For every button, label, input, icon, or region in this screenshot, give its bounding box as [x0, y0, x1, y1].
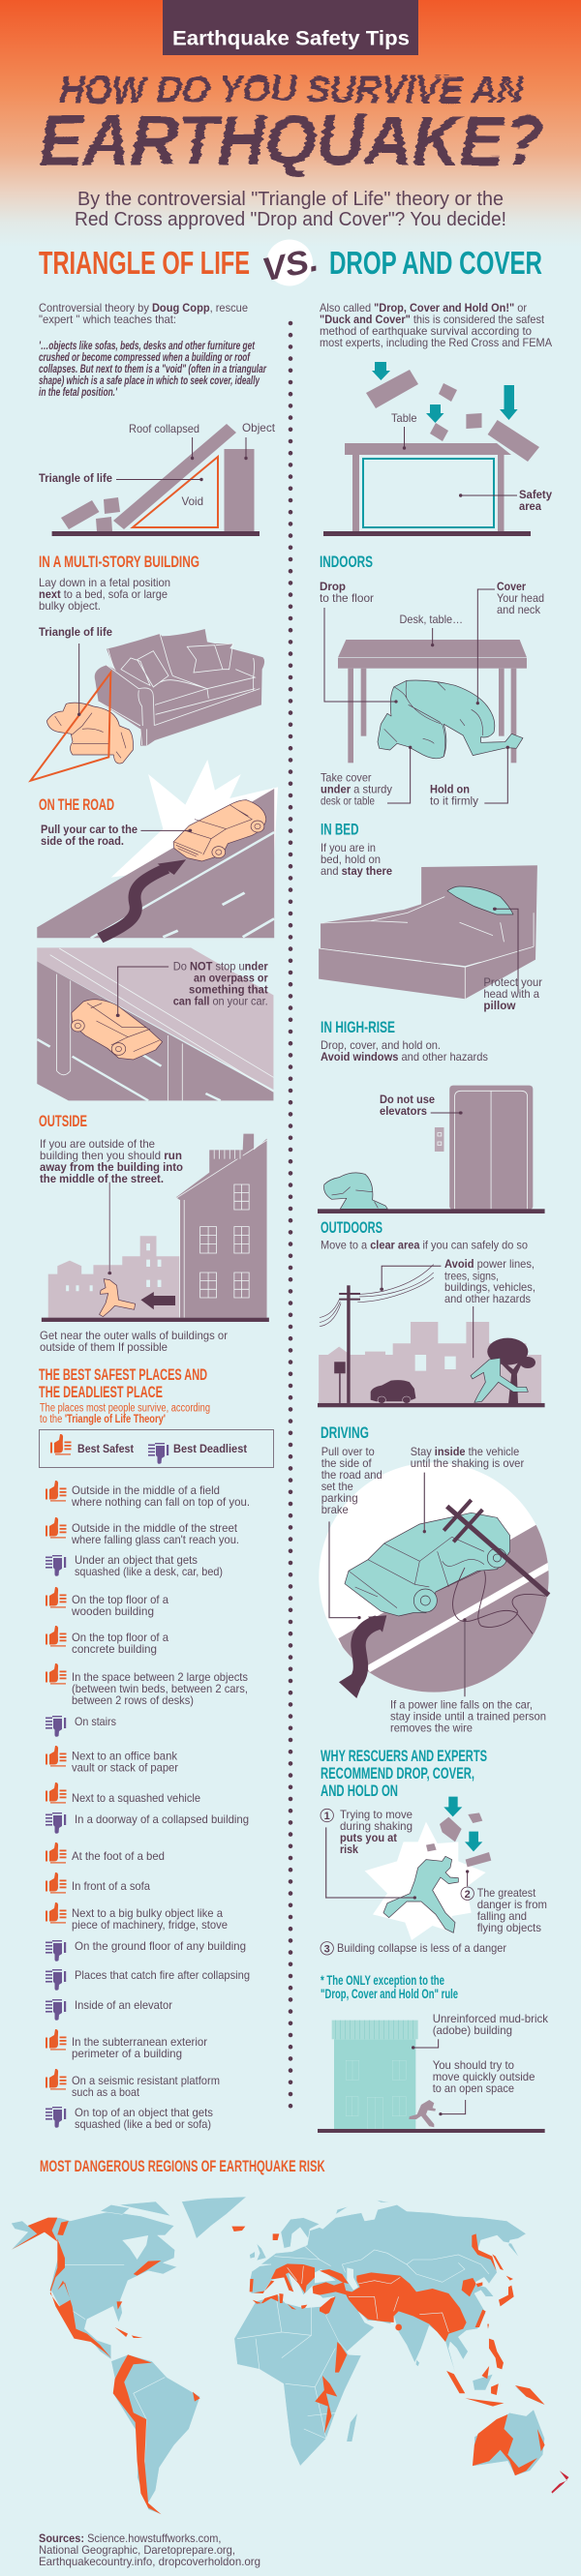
- list item: In the subterranean exterior: [72, 2035, 207, 2049]
- text: adobe: Unreinforced mud-brick: [433, 2012, 549, 2025]
- desk: [338, 640, 527, 763]
- heading: why rescuers: AND HOLD ON: [321, 1782, 398, 1800]
- text: triangle quote: in the fetal position.': [39, 385, 118, 399]
- text: drop and cover intro: [320, 301, 552, 349]
- list item: [46, 2106, 213, 2131]
- text: adobe: (adobe) building: [433, 2023, 512, 2037]
- person: [378, 680, 523, 759]
- diagram: triangle of life: Void: [182, 494, 203, 508]
- road: [37, 789, 274, 938]
- arrow: [140, 1292, 175, 1309]
- section: on the road: [39, 796, 138, 848]
- list item: Next to a squashed vehicle: [72, 1791, 200, 1805]
- diagram: triangle of life: Roof collapsed: [129, 422, 199, 435]
- list item: [46, 2029, 207, 2060]
- illustration: car under power line: [319, 1462, 555, 1698]
- heading: triangle of life: TRIANGLE OF LIFE: [39, 245, 250, 281]
- heading: why rescuers: RECOMMEND DROP, COVER,: [321, 1764, 474, 1782]
- text: driving notes: [321, 1445, 546, 1735]
- section: high-rise: elevators: [380, 1104, 427, 1118]
- subtitle: Red Cross approved "Drop and Cover"? You decide!: [75, 209, 506, 230]
- runner: [383, 1856, 458, 1932]
- point 3: Building collapse is less of a danger: [337, 1941, 506, 1955]
- text: drop and cover intro: method of earthquake survival according to: [320, 324, 532, 338]
- section heading: best and deadliest: to the 'Triangle of Life Theory': [40, 1414, 166, 1425]
- point 2: danger is from: [477, 1898, 547, 1911]
- list item: [46, 1872, 150, 1893]
- text: triangle quote: shape) which is a safe place in which to seek cover, ideally: [39, 374, 260, 387]
- text: multi-story: [39, 576, 170, 639]
- heading: multi-story: IN A MULTI-STORY BUILDING: [39, 554, 199, 571]
- title: EARTHQUAKE?: [39, 102, 544, 180]
- text: drop and cover intro: most experts, including the Red Cross and FEMA: [320, 336, 552, 349]
- section: high-rise: Avoid windows and other hazards: [321, 1050, 488, 1063]
- diagram: table with falling debris: [323, 362, 552, 536]
- arrow: [100, 859, 186, 938]
- new zealand: [551, 2471, 568, 2494]
- text: triangle intro: [39, 301, 248, 326]
- section: outside: [39, 1113, 183, 1185]
- text: outer walls: outside of them If possible: [40, 1340, 168, 1354]
- tree: [487, 1338, 535, 1403]
- section: indoors: desk or table: [321, 794, 375, 808]
- versus badge: VS.: [259, 241, 321, 289]
- text: triangle intro: Controversial theory by Doug Copp, rescue: [39, 301, 248, 315]
- text: overpass warning: something that: [189, 983, 268, 997]
- section: high-rise: Drop, cover, and hold on.: [321, 1038, 441, 1052]
- list item: Next to an office bank: [72, 1750, 178, 1763]
- list item: where falling glass can't reach you.: [71, 1533, 239, 1546]
- list item: (between twin beds, between 2 cars,: [72, 1682, 248, 1695]
- section: indoors: Drop: [320, 580, 346, 593]
- list item: wooden building: [71, 1604, 154, 1618]
- exception heading: "Drop, Cover and Hold On" rule: [321, 1987, 458, 2001]
- text: overpass warning: Do NOT stop under: [173, 960, 268, 973]
- person in fetal position: [46, 703, 133, 764]
- list item: [46, 1517, 239, 1546]
- section: in bed: bed, hold on: [321, 853, 381, 866]
- car: [71, 1000, 163, 1060]
- section: indoors: to the floor: [320, 591, 374, 605]
- section: on the road: side of the road.: [41, 834, 124, 848]
- section: outdoors: and other hazards: [444, 1292, 531, 1305]
- section: on the road: Pull your car to the: [41, 823, 138, 836]
- point 2: [461, 1886, 547, 1934]
- section: high-rise: IN HIGH-RISE: [321, 1019, 395, 1036]
- text: drop and cover intro: Also called "Drop, Cover and Hold On!" or: [320, 301, 527, 315]
- illustration: outdoor hazards: [318, 1265, 545, 1407]
- text: multi-story: Triangle of life: [39, 625, 112, 639]
- borders: [274, 2245, 489, 2282]
- section: outdoors: trees, signs,: [444, 1270, 499, 1283]
- illustration: elevator: [318, 1086, 545, 1213]
- section: driving heading: DRIVING: [321, 1424, 369, 1442]
- point 3: 3: [324, 1943, 330, 1955]
- list item: Inside of an elevator: [75, 1998, 172, 2012]
- list item: [46, 1842, 165, 1864]
- heading: why rescuers: [321, 1747, 487, 1800]
- list item: On stairs: [75, 1715, 116, 1728]
- sources: National Geographic, Daretoprepare.org,: [39, 2543, 235, 2557]
- text: protect head: Protect your: [483, 975, 542, 989]
- text: drop and cover intro: "Duck and Cover" this is considered the safest: [320, 313, 545, 326]
- illustration: building and runner: [42, 1134, 269, 1322]
- legend: [39, 1430, 273, 1467]
- borders: [63, 2265, 337, 2465]
- section heading: best and deadliest: [39, 1365, 210, 1425]
- sources: Earthquakecountry.info, dropcoverholdon.org: [39, 2555, 260, 2568]
- ground: [42, 1318, 269, 1322]
- section: indoors: to it firmly: [430, 794, 478, 808]
- illustration: adobe building: [318, 2021, 545, 2133]
- point 2: The greatest: [477, 1886, 536, 1900]
- list item: Next to a big bulky object like a: [72, 1906, 223, 1920]
- section: outside: away from the building into: [40, 1160, 183, 1174]
- risk zones: [11, 2218, 545, 2514]
- list item: piece of machinery, fridge, stove: [72, 1918, 228, 1932]
- section: indoors: Hold on: [430, 783, 470, 796]
- section: indoors: [320, 554, 544, 808]
- section: in bed: If you are in: [321, 841, 376, 854]
- list item: In the space between 2 large objects: [72, 1670, 248, 1684]
- small running person: [409, 2100, 436, 2127]
- text: adobe: You should try to: [433, 2058, 514, 2072]
- text: triangle quote: '…objects like sofas, beds, desks and other furniture get: [39, 339, 256, 352]
- list item: [46, 1481, 250, 1509]
- list item: [46, 1968, 250, 1991]
- legend: Best Deadliest: [173, 1442, 247, 1455]
- text: driving notes: the side of: [321, 1456, 372, 1470]
- fallen power pole: [443, 1500, 549, 1633]
- car: [173, 800, 266, 861]
- list item: Under an object that gets: [75, 1553, 198, 1567]
- section: on the road: ON THE ROAD: [39, 796, 114, 814]
- section: in bed: [321, 822, 392, 878]
- section: indoors: Cover: [497, 580, 526, 593]
- text: triangle quote: [39, 339, 267, 399]
- point 1: [321, 1808, 413, 1856]
- diagram: table with falling debris: Table: [391, 411, 417, 425]
- americas, africa and oceania: [11, 2197, 568, 2514]
- list item: On the top floor of a: [72, 1631, 168, 1644]
- illustration: sofa with fetal person: [31, 629, 264, 781]
- text: multi-story: bulky object.: [39, 599, 101, 613]
- crouching person: [324, 1173, 387, 1209]
- car: [345, 1513, 510, 1616]
- text: multi-story: Lay down in a fetal position: [39, 576, 170, 589]
- list item: vault or stack of paper: [72, 1761, 178, 1775]
- text: driving notes: Pull over to: [321, 1445, 375, 1458]
- sign: [334, 1362, 346, 1403]
- list item: In a doorway of a collapsed building: [75, 1812, 249, 1826]
- point 1: risk: [340, 1842, 358, 1856]
- title: HOW DO YOU SURVIVE AN: [59, 70, 524, 110]
- section: outdoors: [321, 1219, 535, 1305]
- header badge: Earthquake Safety Tips: [172, 27, 410, 50]
- section: high-rise: Do not use: [380, 1093, 435, 1106]
- list item: perimeter of a building: [72, 2047, 182, 2060]
- list item: [46, 1746, 178, 1775]
- text: triangle intro: "expert " which teaches that:: [39, 313, 176, 326]
- point 2: falling and: [477, 1909, 527, 1923]
- land masses: [250, 2200, 526, 2378]
- list item: [46, 1626, 168, 1656]
- section heading: best and deadliest: THE DEADLIEST PLACE: [39, 1383, 163, 1401]
- list item: between 2 rows of desks): [72, 1693, 194, 1707]
- text: protect head: pillow: [483, 999, 516, 1012]
- section heading: best and deadliest: The places most people survive, according: [40, 1403, 210, 1415]
- sources: [39, 2531, 260, 2568]
- list item: On the top floor of a: [72, 1593, 168, 1606]
- list item: where nothing can fall on top of you.: [71, 1495, 250, 1509]
- section: in bed: and stay there: [321, 864, 392, 878]
- point 1: during shaking: [340, 1819, 413, 1833]
- point 1: Trying to move: [340, 1808, 413, 1821]
- section: indoors: Desk, table…: [399, 613, 463, 626]
- falling objects: [426, 1812, 491, 1867]
- text: overpass warning: [173, 960, 268, 1008]
- point 1: 1: [324, 1811, 330, 1822]
- text: driving notes: parking: [321, 1491, 358, 1505]
- subtitle: By the controversial "Triangle of Life" theory or the: [77, 189, 504, 210]
- sofa: [95, 629, 264, 746]
- list item: squashed (like a desk, car, bed): [75, 1565, 223, 1578]
- section: indoors: and neck: [497, 603, 541, 616]
- section: outdoors: Move to a clear area if you can safely do so: [321, 1239, 528, 1252]
- illustration: overpass: [37, 947, 273, 1100]
- diagram: triangle of life: Object: [242, 421, 276, 434]
- text: driving notes: brake: [321, 1503, 349, 1516]
- risk zones: [231, 2227, 514, 2373]
- illustration: bed: [319, 865, 537, 999]
- land masses: [11, 2197, 546, 2514]
- arrow: [339, 1615, 386, 1698]
- skyline: [48, 1236, 180, 1318]
- section: indoors: INDOORS: [320, 554, 373, 571]
- subtitle: [75, 189, 506, 230]
- legend: Best Safest: [77, 1442, 134, 1455]
- text: adobe: to an open space: [433, 2082, 514, 2095]
- text: driving notes: stay inside until a trained person: [390, 1710, 546, 1723]
- section: outside: If you are outside of the: [40, 1137, 155, 1151]
- exception heading: [321, 1973, 458, 2001]
- list item: concrete building: [72, 1642, 157, 1656]
- heading: map: MOST DANGEROUS REGIONS OF EARTHQUAKE RISK: [40, 2158, 325, 2175]
- point 2: 2: [465, 1889, 471, 1901]
- section: indoors: Your head: [497, 591, 544, 605]
- text: outer walls: [40, 1329, 228, 1354]
- list item: Outside in the middle of the street: [72, 1521, 238, 1535]
- runner: [100, 1279, 136, 1317]
- list item: [46, 1812, 249, 1834]
- list item: In front of a sofa: [72, 1879, 150, 1893]
- house: [176, 1134, 267, 1318]
- eurasia: [231, 2200, 526, 2378]
- illustration: person under desk: [324, 589, 527, 803]
- text: driving notes: the road and: [321, 1468, 382, 1482]
- list item: [46, 1553, 223, 1578]
- diagram: table with falling debris: area: [519, 499, 541, 513]
- sources: Sources: Science.howstuffworks.com,: [39, 2531, 221, 2545]
- text: multi-story: next to a bed, sofa or large: [39, 587, 168, 601]
- list item: [46, 1902, 228, 1932]
- section: outside: OUTSIDE: [39, 1113, 87, 1130]
- point 1: puts you at: [340, 1831, 397, 1844]
- header badge: [163, 0, 418, 55]
- illustration: car pulling over: [37, 760, 278, 938]
- borders within risk zones: [288, 2266, 448, 2332]
- list item: squashed (like a bed or sofa): [75, 2117, 211, 2131]
- text: outer walls: Get near the outer walls of buildings or: [40, 1329, 228, 1342]
- list item: On the ground floor of any building: [75, 1939, 246, 1953]
- section: outside: building then you should run: [40, 1149, 182, 1162]
- utility pole: [320, 1265, 434, 1403]
- point 2: flying objects: [477, 1921, 541, 1934]
- text: driving notes: Stay inside the vehicle: [411, 1445, 519, 1458]
- list item: [46, 1715, 116, 1737]
- section: outside: the middle of the street.: [40, 1172, 164, 1185]
- text: adobe: move quickly outside: [433, 2070, 535, 2083]
- world map: [11, 2197, 568, 2514]
- list item: such as a boat: [72, 2085, 140, 2099]
- heading: why rescuers: WHY RESCUERS AND EXPERTS: [321, 1747, 487, 1765]
- section heading: best and deadliest: THE BEST SAFEST PLACES AND: [39, 1365, 207, 1384]
- text: driving notes: If a power line falls on the car,: [390, 1698, 533, 1712]
- ground: [318, 1403, 545, 1407]
- list item: Places that catch fire after collapsing: [75, 1968, 250, 1982]
- text: triangle quote: crushed or become compressed when a building or roof: [39, 350, 251, 364]
- section: in bed: IN BED: [321, 822, 359, 839]
- exception heading: * The ONLY exception to the: [321, 1973, 444, 1988]
- list item: [46, 1587, 168, 1618]
- list item: [46, 1939, 246, 1962]
- list item: [46, 1663, 248, 1707]
- starburst: [111, 760, 278, 878]
- list item: On a seismic resistant platform: [72, 2074, 220, 2087]
- text: triangle quote: collapses. But next to them is a "void" (often in a triangular: [39, 362, 267, 375]
- section: outdoors: OUTDOORS: [321, 1219, 382, 1237]
- pillow: [447, 886, 513, 914]
- diagram: triangle of life: Triangle of life: [39, 471, 112, 485]
- arrows: [443, 1797, 462, 1816]
- section: outdoors: buildings, vehicles,: [444, 1280, 535, 1294]
- text: protect head: [483, 975, 542, 1012]
- illustration: runner and falling objects: [326, 1797, 491, 1940]
- title: [39, 70, 544, 180]
- silhouette car: [371, 1380, 415, 1401]
- starburst: [365, 1822, 486, 1940]
- text: overpass warning: can fall on your car.: [173, 995, 268, 1008]
- center dotted divider: [289, 323, 292, 2112]
- list item: On top of an object that gets: [75, 2106, 213, 2119]
- triangle outline: [31, 673, 110, 781]
- text: driving notes: set the: [321, 1480, 353, 1493]
- section: indoors: Take cover: [321, 771, 372, 785]
- list item: [46, 1998, 172, 2021]
- text: driving notes: removes the wire: [390, 1722, 473, 1735]
- section: high-rise: [321, 1019, 488, 1118]
- text: adobe: [433, 2012, 549, 2095]
- section: indoors: under a sturdy: [321, 783, 392, 796]
- running person: [471, 1358, 528, 1402]
- list item: Outside in the middle of a field: [72, 1483, 220, 1497]
- list item: [46, 1782, 200, 1805]
- text: overpass warning: an overpass or: [194, 972, 268, 985]
- diagram: table with falling debris: Safety: [519, 488, 552, 501]
- text: driving notes: until the shaking is over: [411, 1456, 524, 1470]
- list item: At the foot of a bed: [72, 1849, 165, 1863]
- list item: [46, 2069, 220, 2099]
- text: protect head: head with a: [483, 987, 539, 1001]
- skyline: [319, 1322, 541, 1403]
- diagram: triangle of life: [39, 421, 276, 536]
- section: outdoors: Avoid power lines,: [444, 1257, 535, 1271]
